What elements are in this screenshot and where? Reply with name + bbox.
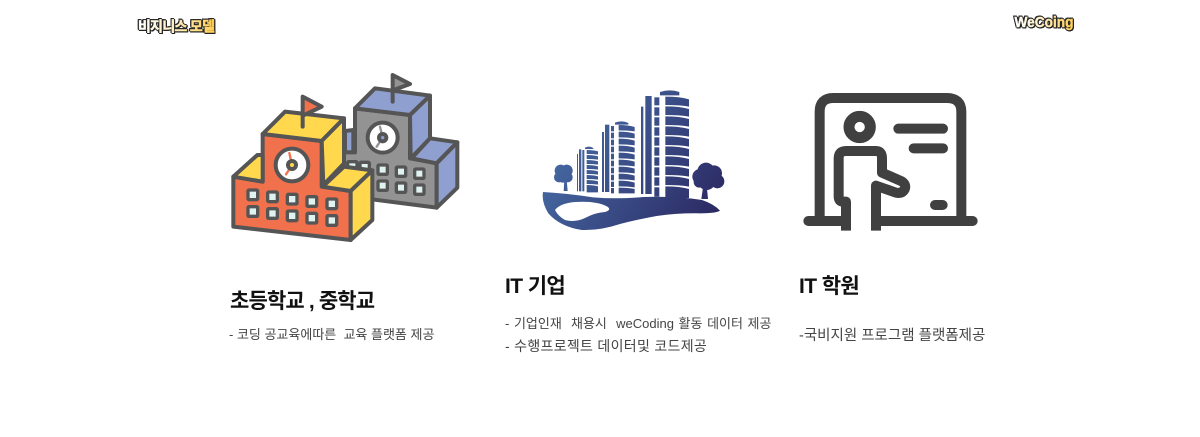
board text lines — [898, 129, 943, 205]
small tower — [577, 147, 598, 192]
middle tower — [602, 121, 635, 193]
text: company description: - 수행프로젝트 데이터및 코드제공 — [505, 338, 707, 354]
board base — [808, 206, 973, 236]
heading: IT academies: IT 학원 — [799, 275, 859, 298]
tall tower — [641, 90, 689, 198]
text: company description: - 기업인재 채용시 weCoding 활동 데이터 제공 — [505, 316, 771, 331]
right tree — [692, 163, 724, 199]
text: company description — [505, 316, 771, 354]
icon: high-rise buildings with trees — [542, 90, 724, 230]
back school: grey building — [343, 75, 457, 208]
icon: teacher at a whiteboard — [803, 93, 978, 231]
heading: elementary and middle school: 초등학교 , 중학교 — [230, 290, 374, 313]
text: school description: - 코딩 공교육에따른 교육 플랫폼 제공 — [229, 327, 434, 342]
presenter head — [849, 116, 870, 138]
front school: orange building — [233, 97, 372, 240]
left tree — [554, 165, 573, 191]
board frame — [820, 98, 961, 220]
heading: IT companies: IT 기업 — [505, 275, 565, 298]
icon: two school buildings — [231, 73, 460, 242]
logo: WeCoing: WeCoing — [1014, 14, 1074, 31]
text: academy description: -국비지원 프로그램 플랫폼제공 — [799, 328, 985, 344]
ground with pond — [543, 192, 720, 230]
heading: business model: 비지니스 모델 — [138, 18, 215, 34]
presenter body and arm — [839, 151, 905, 231]
